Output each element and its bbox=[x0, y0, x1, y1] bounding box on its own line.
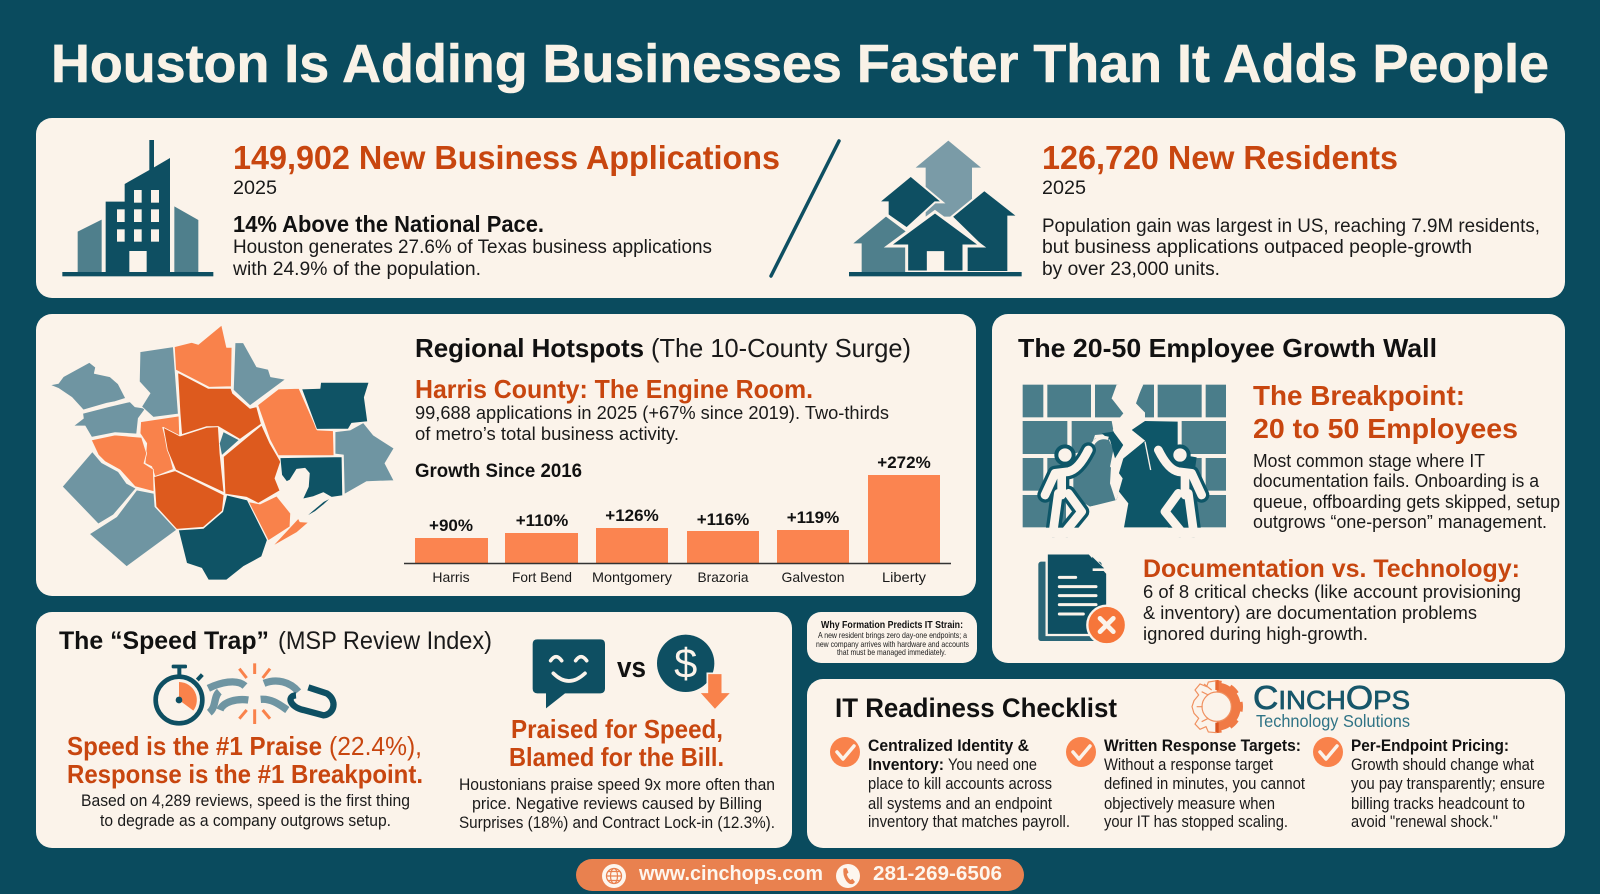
check item: per-endpoint pricing: Growth should change what bbox=[1351, 756, 1534, 774]
check item: per-endpoint pricing: billing tracks headcount to bbox=[1351, 795, 1525, 813]
check item: per-endpoint pricing bbox=[1313, 737, 1545, 831]
bar chart: growth since 2016: Brazoria bbox=[698, 569, 749, 585]
text: praised for speed: price. Negative reviews caused by Billing bbox=[472, 794, 762, 813]
icon: smiley chat vs dollar: $ bbox=[674, 640, 697, 687]
check item: written response targets bbox=[1066, 737, 1305, 831]
bar chart: growth since 2016 bbox=[404, 453, 951, 585]
footer: contact pill bbox=[576, 859, 1024, 891]
text: harris county: of metro’s total business activity. bbox=[415, 423, 679, 444]
heading: speed trap: The “Speed Trap” bbox=[59, 627, 269, 655]
callout: why formation predicts IT strain bbox=[807, 612, 977, 663]
text: new residents: Population gain was largest in US, reaching 7.9M residents, bbox=[1042, 216, 1540, 237]
check item: per-endpoint pricing: Per-Endpoint Pricing: bbox=[1351, 737, 1509, 755]
text: documentation vs technology: Documentation vs. Technology: bbox=[1143, 555, 1520, 583]
icon: stopwatch and broken chain bbox=[156, 663, 334, 724]
text: harris county: Harris County: The Engine Room. bbox=[415, 374, 813, 404]
text: the breakpoint bbox=[1253, 380, 1560, 532]
check item: centralized identity: Inventory: bbox=[868, 756, 944, 774]
bar chart: growth since 2016: +116% bbox=[697, 510, 749, 529]
callout: why formation predicts IT strain: A new resident brings zero day-one endpoints; a bbox=[818, 630, 967, 640]
text: the breakpoint: 20 to 50 Employees bbox=[1253, 413, 1518, 444]
text: praised for speed: Surprises (18%) and Contract Lock-in (12.3%). bbox=[459, 813, 775, 832]
bar chart: growth since 2016: +272% bbox=[877, 453, 931, 472]
check item: written response targets: defined in minutes, you cannot bbox=[1104, 775, 1305, 793]
text: the breakpoint: documentation fails. Onboarding is a bbox=[1253, 470, 1540, 491]
title: Houston Is Adding Businesses Faster Than It Adds People bbox=[51, 34, 1549, 94]
heading: regional hotspots: (The 10-County Surge) bbox=[651, 333, 911, 363]
text: the breakpoint: queue, offboarding gets skipped, setup bbox=[1253, 491, 1560, 512]
text: the breakpoint: outgrows “one-person” management. bbox=[1253, 511, 1547, 532]
check item: centralized identity: Centralized Identity & bbox=[868, 737, 1029, 755]
logo: CinchOps: Technology Solutions bbox=[1256, 711, 1410, 731]
map: counties bbox=[50, 325, 394, 580]
check item: written response targets: your IT has stopped scaling. bbox=[1104, 813, 1288, 831]
logo: CinchOps: CINCHOPS bbox=[1253, 679, 1410, 716]
bar chart: growth since 2016: Growth Since 2016 bbox=[415, 461, 582, 482]
callout: why formation predicts IT strain: Why Formation Predicts IT Strain: bbox=[821, 619, 963, 631]
logo: CinchOps bbox=[1192, 679, 1410, 733]
icon: smiley chat vs dollar bbox=[533, 635, 732, 710]
heading: growth wall: The 20-50 Employee Growth Wall bbox=[1018, 333, 1437, 363]
check item: centralized identity: inventory that matches payroll. bbox=[868, 813, 1070, 831]
heading: regional hotspots bbox=[415, 333, 911, 363]
check item: written response targets: Written Response Targets: bbox=[1104, 737, 1301, 755]
text: praised for speed: Praised for Speed, bbox=[511, 714, 723, 744]
bar chart: growth since 2016: +110% bbox=[516, 511, 568, 530]
text: speed is the number one praise: (22.4%), bbox=[329, 731, 422, 761]
callout: why formation predicts IT strain: that must be managed immediately. bbox=[837, 647, 946, 657]
bar chart: growth since 2016: Montgomery bbox=[592, 569, 672, 585]
text: documentation vs technology: 6 of 8 critical checks (like account provisioning bbox=[1143, 581, 1521, 602]
bar chart: growth since 2016: Galveston bbox=[782, 569, 844, 585]
bar chart: growth since 2016: Fort Bend bbox=[512, 569, 572, 585]
panel: regional hotspots bbox=[36, 314, 976, 596]
text: documentation vs technology bbox=[1143, 555, 1521, 644]
text: new business applications: Houston generates 27.6% of Texas business applications bbox=[233, 237, 712, 258]
panel: IT readiness checklist bbox=[807, 679, 1565, 848]
icon: office building bbox=[62, 140, 213, 276]
text: harris county bbox=[415, 374, 889, 444]
text: the breakpoint: The Breakpoint: bbox=[1253, 380, 1465, 411]
label: vs: vs bbox=[617, 652, 646, 684]
check item: centralized identity: You need one bbox=[948, 756, 1037, 774]
text: speed is the number one praise: Speed is the #1 Praise bbox=[67, 731, 322, 761]
bar chart: growth since 2016: +126% bbox=[605, 506, 659, 525]
text: praised for speed: Houstonians praise speed 9x more often than bbox=[459, 775, 775, 794]
bar chart: growth since 2016: Liberty bbox=[882, 569, 926, 585]
text: new residents: 126,720 New Residents bbox=[1042, 139, 1398, 176]
bar chart: growth since 2016: +119% bbox=[787, 508, 839, 527]
text: speed is the number one praise bbox=[67, 731, 423, 830]
callout: why formation predicts IT strain: new company arrives with hardware and accounts bbox=[816, 639, 969, 649]
bar chart: growth since 2016: +90% bbox=[429, 516, 473, 535]
icon: document with x bbox=[1038, 553, 1126, 644]
text: new business applications bbox=[232, 139, 780, 280]
text: praised for speed bbox=[459, 714, 775, 832]
text: speed is the number one praise: Based on 4,289 reviews, speed is the first thing bbox=[81, 791, 410, 810]
icon: phone bbox=[836, 864, 860, 888]
text: new business applications: 2025 bbox=[233, 178, 277, 199]
text: praised for speed: Blamed for the Bill. bbox=[509, 742, 724, 772]
text: new residents: by over 23,000 units. bbox=[1042, 259, 1220, 280]
check item: centralized identity: place to kill accounts across bbox=[868, 775, 1052, 793]
text: documentation vs technology: ignored during high-growth. bbox=[1143, 623, 1368, 644]
icon: houses bbox=[849, 141, 1022, 276]
panel: businesses vs residents bbox=[36, 118, 1565, 298]
panel: speed trap bbox=[36, 612, 792, 848]
text: new business applications: with 24.9% of the population. bbox=[232, 259, 481, 280]
check item: written response targets: Without a response target bbox=[1104, 756, 1273, 774]
text: documentation vs technology: & inventory) are documentation problems bbox=[1143, 602, 1477, 623]
heading: regional hotspots: Regional Hotspots bbox=[415, 333, 644, 363]
check item: centralized identity bbox=[830, 737, 1070, 831]
text: speed is the number one praise: to degrade as a company outgrows setup. bbox=[100, 811, 391, 830]
text: new residents: but business applications outpaced people-growth bbox=[1042, 237, 1472, 258]
text: new business applications: 14% Above the National Pace. bbox=[233, 211, 544, 237]
bar chart: growth since 2016: Harris bbox=[432, 569, 470, 585]
text: harris county: 99,688 applications in 2025 (+67% since 2019). Two-thirds bbox=[415, 402, 889, 423]
icon: globe bbox=[602, 864, 626, 888]
footer: contact pill: www.cinchops.com bbox=[638, 863, 823, 885]
check item: centralized identity: all systems and an endpoint bbox=[868, 795, 1052, 813]
text: new residents bbox=[1042, 139, 1540, 280]
icon: cracked wall with figures bbox=[1020, 385, 1230, 538]
text: speed is the number one praise: Response is the #1 Breakpoint. bbox=[67, 759, 423, 789]
text: new residents: 2025 bbox=[1042, 178, 1086, 199]
check item: per-endpoint pricing: avoid "renewal shock." bbox=[1351, 813, 1498, 831]
text: new business applications: 149,902 New Business Applications bbox=[233, 139, 780, 176]
panel: growth wall bbox=[992, 314, 1565, 663]
heading: speed trap: (MSP Review Index) bbox=[278, 627, 492, 655]
check item: written response targets: objectively measure when bbox=[1104, 795, 1275, 813]
text: the breakpoint: Most common stage where IT bbox=[1253, 450, 1485, 471]
heading: IT readiness checklist: IT Readiness Checklist bbox=[835, 693, 1117, 723]
footer: contact pill: 281-269-6506 bbox=[873, 863, 1002, 885]
check item: per-endpoint pricing: you pay transparently; ensure bbox=[1351, 775, 1545, 793]
heading: speed trap bbox=[59, 627, 492, 655]
